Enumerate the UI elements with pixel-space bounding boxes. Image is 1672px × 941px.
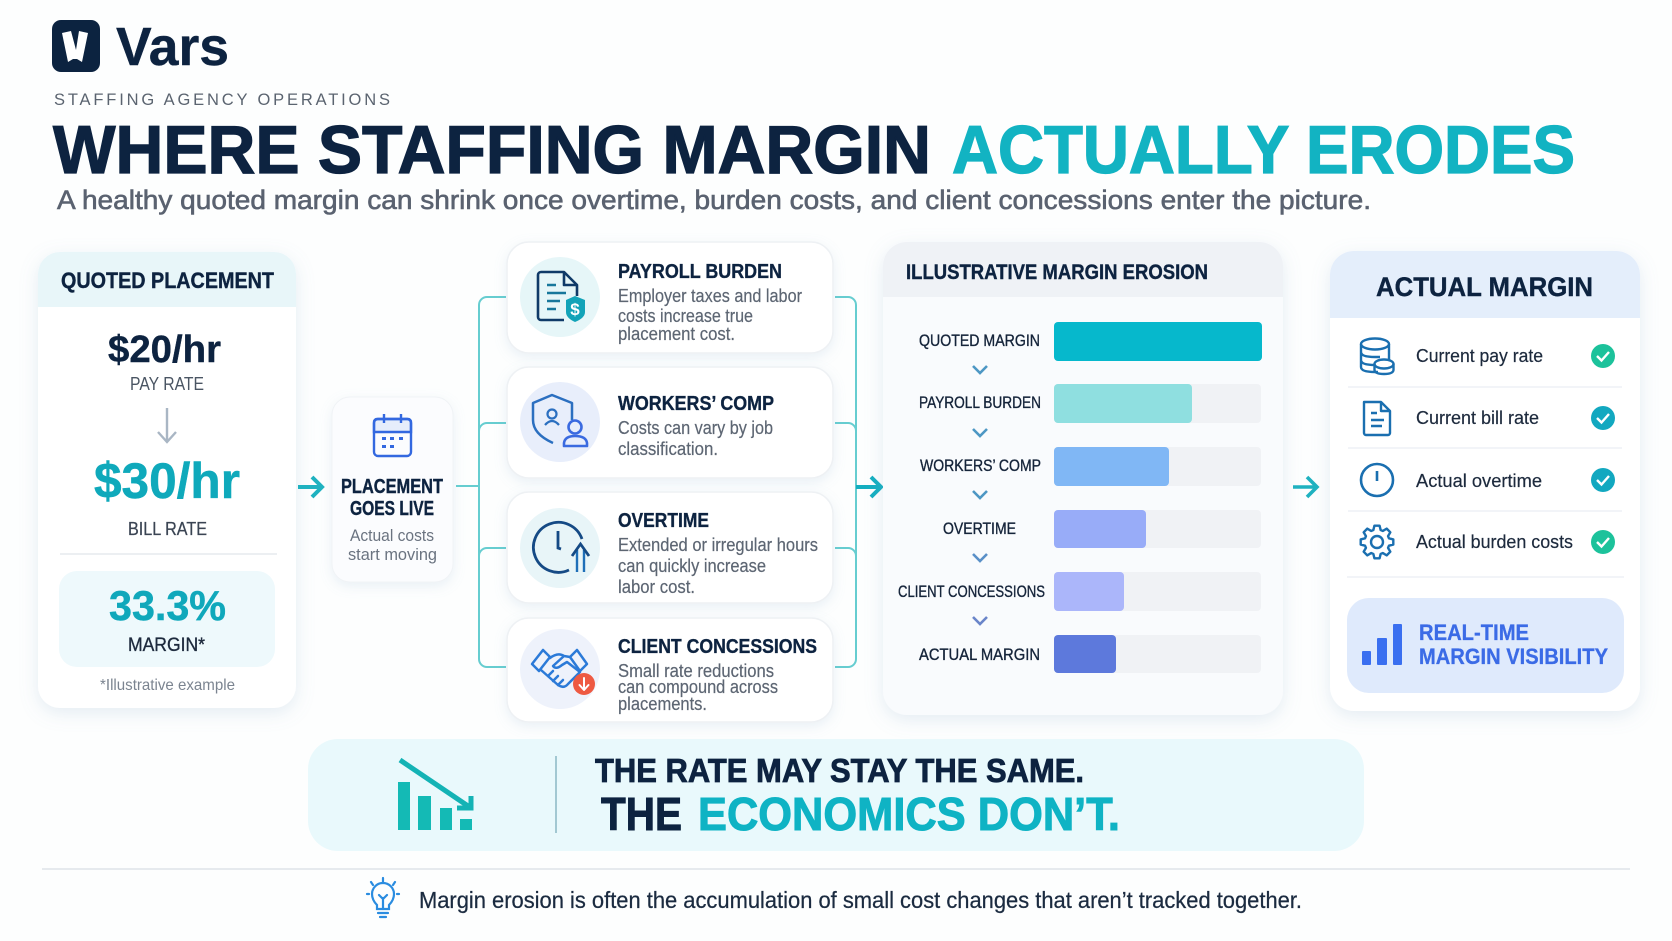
description: start moving xyxy=(348,545,437,564)
icon: gear xyxy=(1361,526,1393,558)
bar: quoted margin xyxy=(919,322,1262,361)
title xyxy=(53,112,1575,188)
callout text xyxy=(1419,620,1608,669)
heading: placement goes live: PLACEMENT xyxy=(341,476,443,498)
row: actual overtime xyxy=(1361,464,1615,496)
card description: Small rate reductions xyxy=(618,661,774,681)
card: workers' comp xyxy=(507,367,833,478)
banner line two: THE xyxy=(601,788,682,840)
bar: overtime: OVERTIME xyxy=(943,520,1016,538)
heading: quoted placement: QUOTED PLACEMENT xyxy=(61,268,274,293)
bar: client concessions: CLIENT CONCESSIONS xyxy=(898,583,1045,601)
icon: clock xyxy=(1361,464,1393,496)
check xyxy=(1591,530,1615,554)
card: overtime xyxy=(507,492,833,603)
card text: OVERTIME xyxy=(618,510,709,532)
margin callout: MARGIN* xyxy=(128,635,206,656)
arrow: cards to chart xyxy=(856,477,881,497)
icon: rising bars xyxy=(1362,624,1402,665)
card description: labor cost. xyxy=(618,577,695,597)
description: Actual costs xyxy=(350,526,434,545)
description xyxy=(348,526,437,564)
panel: actual margin xyxy=(1330,251,1640,711)
icon: payroll document xyxy=(520,257,600,337)
callout: real-time margin visibility xyxy=(1347,598,1624,693)
row: actual burden costs xyxy=(1361,526,1615,558)
chart header xyxy=(883,242,1283,297)
bill rate value: $30/hr xyxy=(94,453,240,509)
row: current bill rate: Current bill rate xyxy=(1416,408,1539,428)
icon: shield and person xyxy=(520,382,600,462)
arrow: pay to bill xyxy=(158,408,176,442)
card description: costs increase true xyxy=(618,306,753,326)
icon: coins xyxy=(1361,338,1394,374)
heading: placement goes live xyxy=(341,476,443,520)
bar: payroll burden xyxy=(919,384,1261,423)
card description: Employer taxes and labor xyxy=(618,286,802,306)
bar: workers' comp xyxy=(920,447,1261,486)
icon: logo mark xyxy=(52,20,100,72)
icon: payroll document: $ xyxy=(570,300,580,319)
card: client concessions xyxy=(507,618,833,722)
connector: fan out to cost cards xyxy=(456,297,506,667)
banner line one: THE RATE MAY STAY THE SAME. xyxy=(595,752,1084,789)
card description xyxy=(618,418,773,459)
row: actual burden costs: Actual burden costs xyxy=(1416,532,1573,552)
card description: can quickly increase xyxy=(618,556,766,576)
callout text: REAL-TIME xyxy=(1419,620,1529,645)
row: current bill rate xyxy=(1364,402,1615,435)
arrow: quoted to live xyxy=(298,477,322,497)
card: payroll burden xyxy=(507,242,833,353)
card description: placements. xyxy=(618,694,707,714)
eyebrow label: STAFFING AGENCY OPERATIONS xyxy=(54,91,390,109)
bar: actual margin: ACTUAL MARGIN xyxy=(919,646,1040,664)
connector: fan in from cost cards xyxy=(835,297,856,667)
card description: placement cost. xyxy=(618,324,735,344)
margin callout xyxy=(59,571,275,667)
bar: quoted margin: QUOTED MARGIN xyxy=(919,332,1040,350)
row: current pay rate xyxy=(1361,338,1615,374)
bar: workers' comp: WORKERS’ COMP xyxy=(920,457,1041,475)
brand logo xyxy=(52,17,229,77)
pay rate value: $20/hr xyxy=(108,329,221,371)
banner: key message xyxy=(308,739,1364,851)
footer takeaway: Margin erosion is often the accumulation of small cost changes that aren’t tracked together. xyxy=(419,887,1302,913)
card description: can compound across xyxy=(618,677,778,697)
margin callout: 33.3% xyxy=(109,582,226,629)
title: WHERE STAFFING MARGIN xyxy=(53,112,931,188)
check xyxy=(1591,344,1615,368)
card text: WORKERS’ COMP xyxy=(618,393,774,415)
row: actual overtime: Actual overtime xyxy=(1416,471,1542,491)
panel header xyxy=(38,252,296,307)
heading: chart title: ILLUSTRATIVE MARGIN EROSION xyxy=(906,261,1208,284)
card description: classification. xyxy=(618,439,718,459)
check xyxy=(1591,468,1615,492)
pay rate label: PAY RATE xyxy=(130,374,204,394)
heading: placement goes live: GOES LIVE xyxy=(350,498,434,520)
card text: PAYROLL BURDEN xyxy=(618,261,782,283)
icon: document xyxy=(1364,402,1390,435)
panel: placement goes live xyxy=(332,397,453,582)
card description: Costs can vary by job xyxy=(618,418,773,438)
card description: Extended or irregular hours xyxy=(618,535,818,555)
bar: actual margin xyxy=(919,635,1261,673)
panel: quoted placement xyxy=(38,252,296,708)
chevrons between bars xyxy=(973,366,987,624)
bill rate label: BILL RATE xyxy=(128,519,207,539)
panel: illustrative margin erosion chart xyxy=(883,242,1283,715)
arrow: chart to actual margin xyxy=(1293,477,1317,497)
card text: CLIENT CONCESSIONS xyxy=(618,636,817,658)
card description xyxy=(618,535,818,597)
title: ACTUALLY ERODES xyxy=(952,112,1575,188)
panel header xyxy=(1330,251,1640,318)
icon: light bulb xyxy=(367,878,399,917)
bar: overtime xyxy=(943,510,1261,548)
banner line two: ECONOMICS DON’T. xyxy=(698,788,1120,840)
icon: clock with up arrow xyxy=(520,508,600,588)
card description xyxy=(618,286,802,344)
card description xyxy=(618,661,778,714)
brand name: Vars xyxy=(116,17,229,77)
bar: client concessions xyxy=(898,572,1261,611)
heading: actual margin: ACTUAL MARGIN xyxy=(1376,272,1593,302)
subtitle: A healthy quoted margin can shrink once overtime, burden costs, and client concessions enter the picture. xyxy=(57,185,1371,215)
icon: handshake with down badge xyxy=(520,629,600,709)
check xyxy=(1591,406,1615,430)
bar: payroll burden: PAYROLL BURDEN xyxy=(919,394,1041,412)
row: current pay rate: Current pay rate xyxy=(1416,346,1543,366)
icon: calendar xyxy=(374,414,411,456)
icon: declining bars with arrow xyxy=(398,760,472,830)
footnote: *Illustrative example xyxy=(100,677,235,694)
callout text: MARGIN VISIBILITY xyxy=(1419,644,1608,669)
